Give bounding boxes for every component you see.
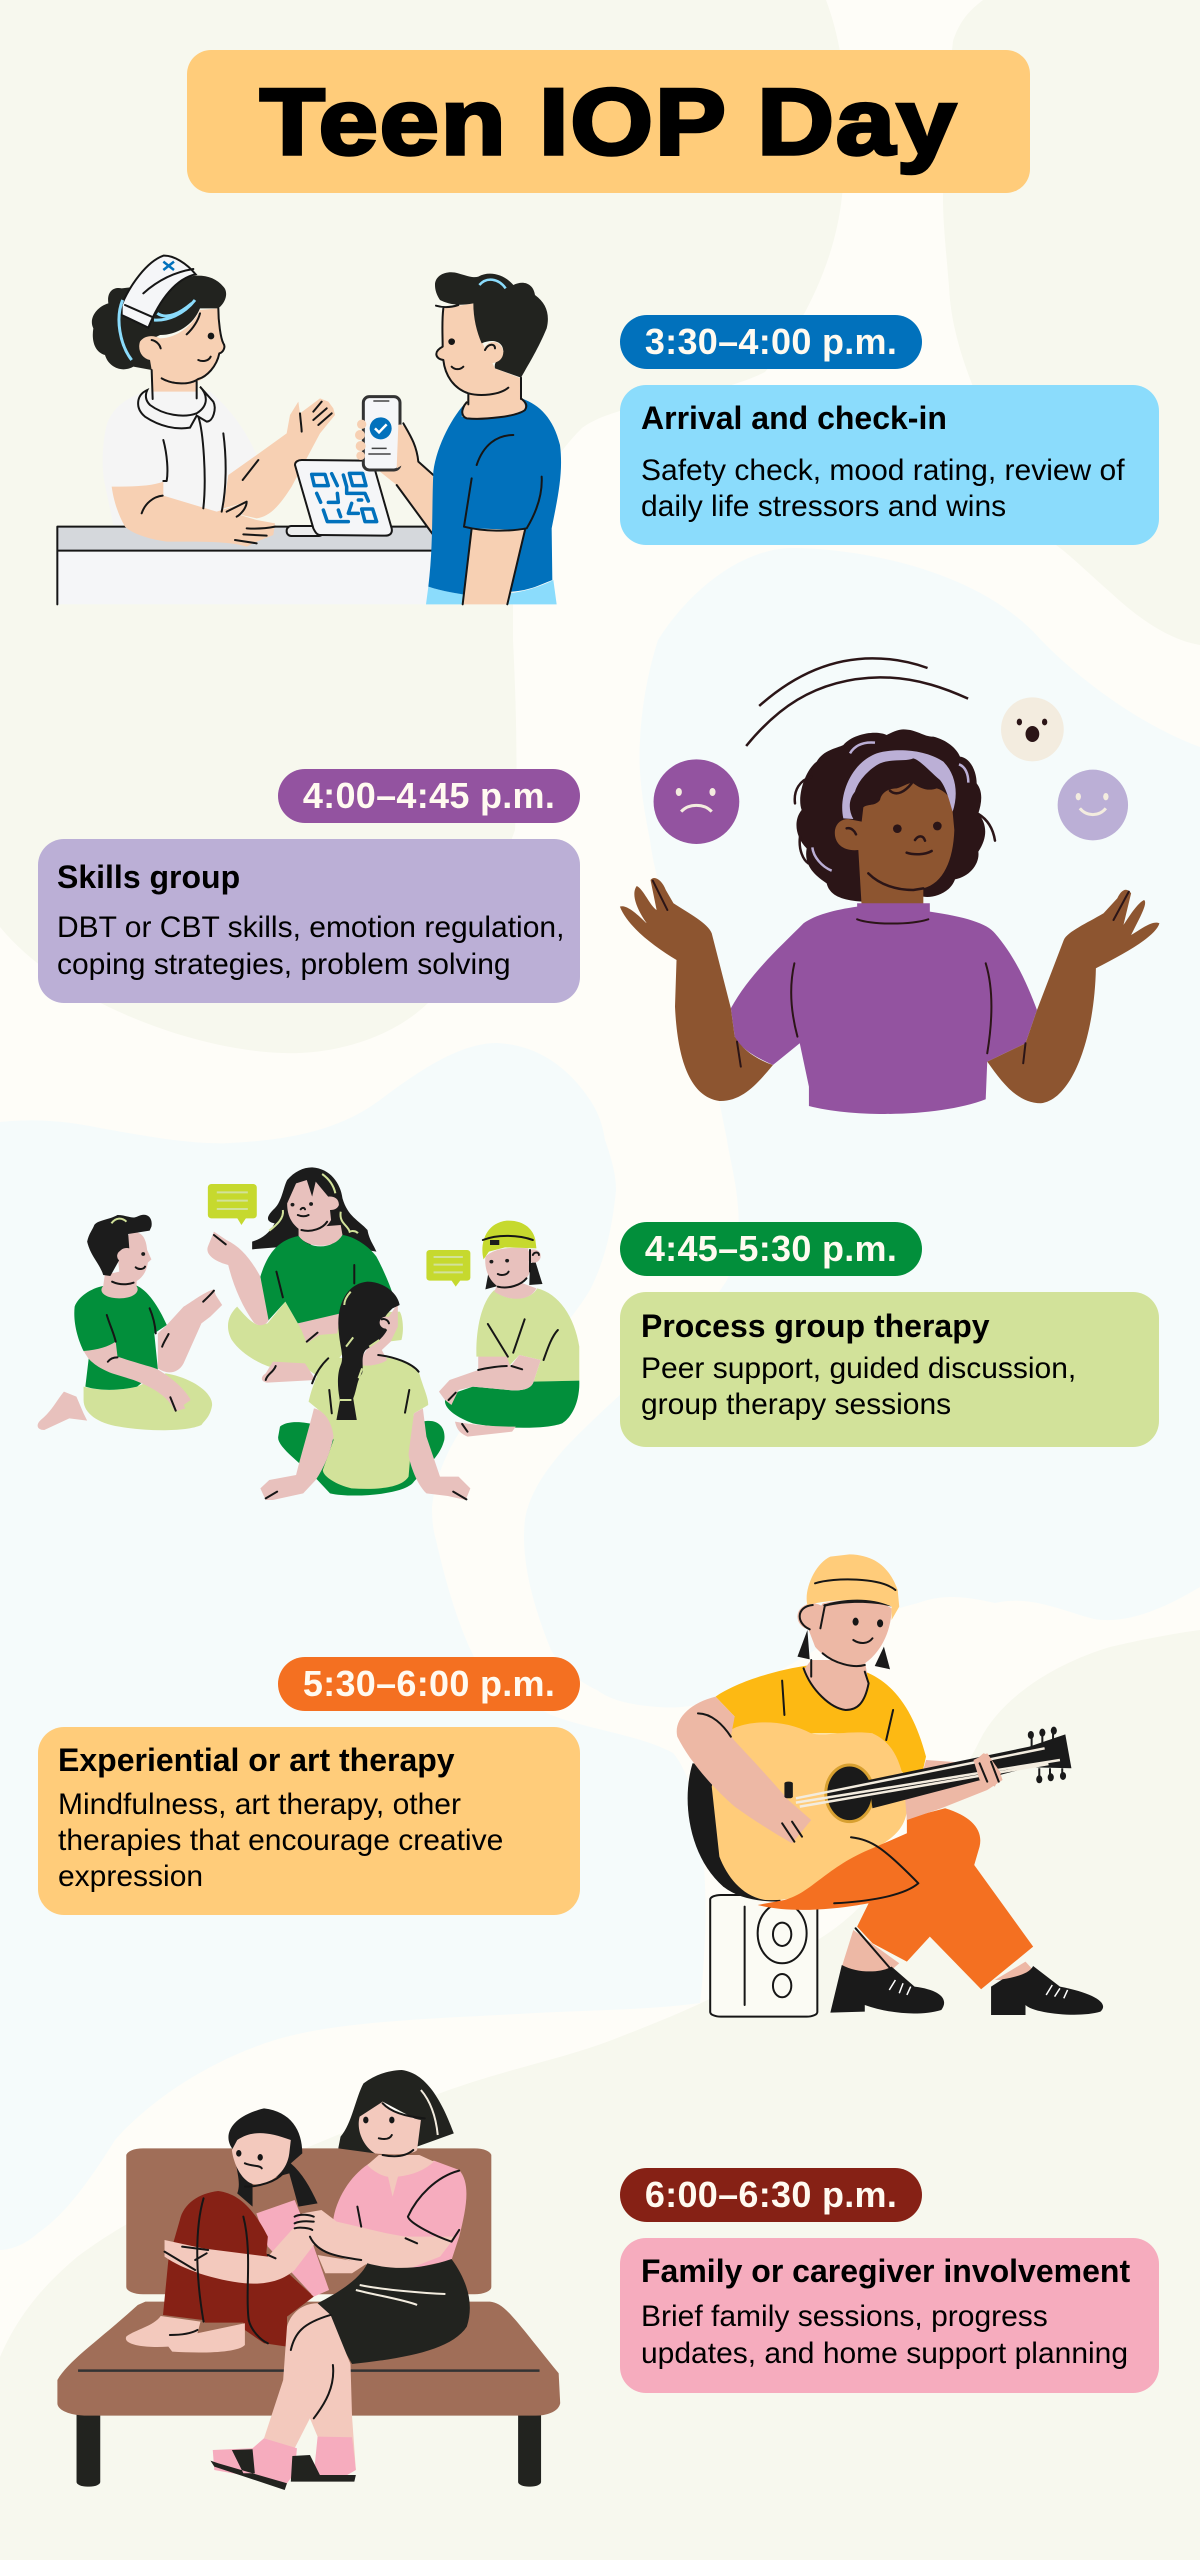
time pill: arrival — [620, 315, 922, 369]
surprised face — [1001, 697, 1064, 761]
panel text: daily life stressors and wins — [641, 490, 1006, 523]
speech bubble left — [208, 1184, 257, 1225]
panel text — [58, 1788, 503, 1893]
panel text: Safety check, mood rating, review of — [641, 454, 1125, 487]
nurse — [92, 256, 335, 547]
title banner — [187, 50, 1030, 193]
illustration: four teens in group therapy — [38, 1167, 579, 1500]
time pill: experiential — [278, 1657, 580, 1711]
time pill: skills: 4:00–4:45 p.m. — [303, 775, 555, 816]
couch — [57, 2148, 560, 2487]
title banner: Teen IOP Day — [259, 68, 958, 174]
panel text: Peer support, guided discussion, — [641, 1352, 1076, 1385]
panel text — [641, 454, 1125, 523]
teen with yellow-green cap — [439, 1221, 579, 1437]
illustration: teen with curly hair and raised hands — [620, 729, 1159, 1114]
teen and guitar — [677, 1554, 1103, 2015]
panel: process group therapy — [620, 1292, 1159, 1447]
time pill: arrival: 3:30–4:00 p.m. — [645, 321, 897, 362]
panel text: DBT or CBT skills, emotion regulation, — [57, 911, 564, 944]
panel: arrival and check-in — [620, 385, 1159, 545]
panel text: group therapy sessions — [641, 1388, 951, 1421]
speaker — [710, 1895, 817, 2017]
panel text: updates, and home support planning — [641, 2337, 1128, 2370]
head — [795, 729, 995, 907]
panel heading: Skills group — [57, 859, 240, 895]
happy face — [1058, 770, 1128, 840]
teen girl seen from behind — [260, 1282, 470, 1500]
panel heading: Process group therapy — [641, 1308, 990, 1344]
panel text: Brief family sessions, progress — [641, 2300, 1048, 2333]
time pill: skills — [278, 769, 580, 823]
illustration: nurse checks in teen with QR code — [57, 256, 561, 604]
time pill: experiential: 5:30–6:00 p.m. — [303, 1663, 555, 1704]
illustration: teen playing guitar on a speaker — [677, 1554, 1103, 2017]
speech bubble right — [426, 1250, 470, 1287]
time pill: family — [620, 2168, 922, 2222]
panel text — [641, 1352, 1076, 1421]
panel: skills group — [38, 839, 580, 1003]
panel heading: Family or caregiver involvement — [641, 2253, 1130, 2289]
panel text: expression — [58, 1860, 203, 1893]
arcs — [746, 658, 968, 746]
panel heading: Arrival and check-in — [641, 400, 947, 436]
time pill: process group — [620, 1222, 922, 1276]
panel text — [641, 2300, 1128, 2370]
panel text: Mindfulness, art therapy, other — [58, 1788, 461, 1821]
mother — [210, 2070, 470, 2490]
sad face — [654, 759, 739, 844]
panel: experiential or art therapy — [38, 1727, 580, 1915]
illustration: mother comforts daughter on a couch — [57, 2070, 560, 2490]
panel text — [57, 911, 564, 981]
daughter hugging her knees — [126, 2108, 329, 2353]
teen boy with phone — [355, 272, 561, 604]
torso and arms — [620, 878, 1159, 1114]
panel text: coping strategies, problem solving — [57, 948, 511, 981]
tablet with QR code — [287, 460, 392, 536]
panel heading: Experiential or art therapy — [58, 1742, 455, 1778]
teen girl at the back — [207, 1167, 403, 1383]
panel: family or caregiver involvement — [620, 2238, 1159, 2393]
panel text: therapies that encourage creative — [58, 1824, 503, 1857]
time pill: process group: 4:45–5:30 p.m. — [645, 1228, 897, 1269]
check-in counter — [57, 527, 433, 604]
illustration: teen juggling emotion faces — [654, 658, 1128, 844]
teen boy on the left — [38, 1215, 222, 1430]
time pill: family: 6:00–6:30 p.m. — [645, 2174, 897, 2215]
